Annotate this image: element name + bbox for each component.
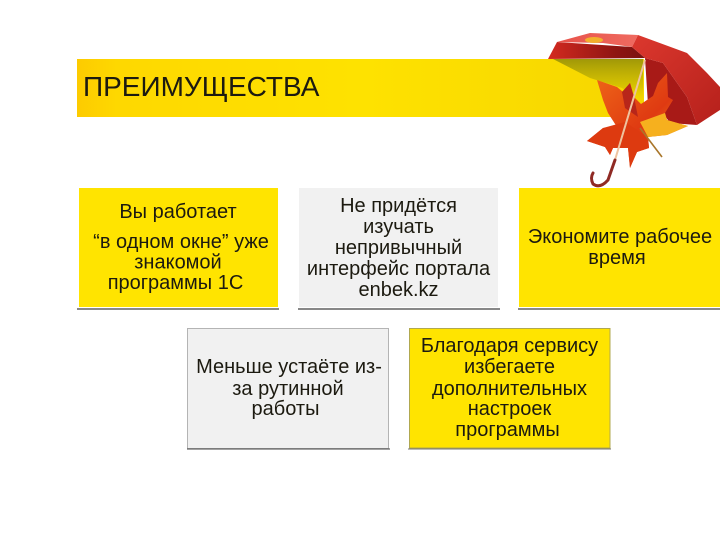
title banner [77,59,644,117]
panel text [196,356,382,420]
panel text: настроек [468,398,551,420]
leaf stem [640,128,662,157]
panel text [307,195,491,301]
panel: less tired [187,328,390,449]
umbrella underside left [548,42,645,59]
panel text: enbek.kz [358,279,439,301]
panel: one window [77,188,279,309]
umbrella right panel [632,35,720,125]
panel text: интерфейс портала [307,258,491,280]
umbrella shaft and handle [615,60,645,160]
panel text: время [588,247,646,269]
icon: red umbrella with maple leaf [548,33,720,186]
umbrella shadow on banner [553,59,643,105]
panel text: “в одном окне” уже [93,231,269,253]
panel: no need to learn [298,188,500,309]
panel text: Благодаря сервису [421,335,598,357]
panel text: знакомой [134,252,222,274]
panel text [528,226,712,269]
heading: ПРЕИМУЩЕСТВА [83,71,320,102]
panel text: изучать [363,216,434,238]
panel text: Не придётся [340,195,457,217]
panel text: программы 1С [108,272,243,294]
panel: save time [518,188,720,309]
panel text: дополнительных [432,378,587,400]
panel: avoid extra settings [408,328,611,449]
maple leaf [587,73,688,168]
panel text: Экономите рабочее [528,226,712,248]
panel text [93,201,269,294]
panel text: работы [252,398,319,420]
umbrella top panel [557,33,638,47]
panel text [421,335,598,441]
panel text: непривычный [335,237,462,259]
panel text: программы [455,419,560,441]
umbrella underside right [645,58,697,125]
panel text: Вы работает [119,201,237,223]
panel text: Меньше устаёте из- [196,356,382,378]
panel text: за рутинной [232,378,344,400]
panel text: избегаете [464,356,555,378]
